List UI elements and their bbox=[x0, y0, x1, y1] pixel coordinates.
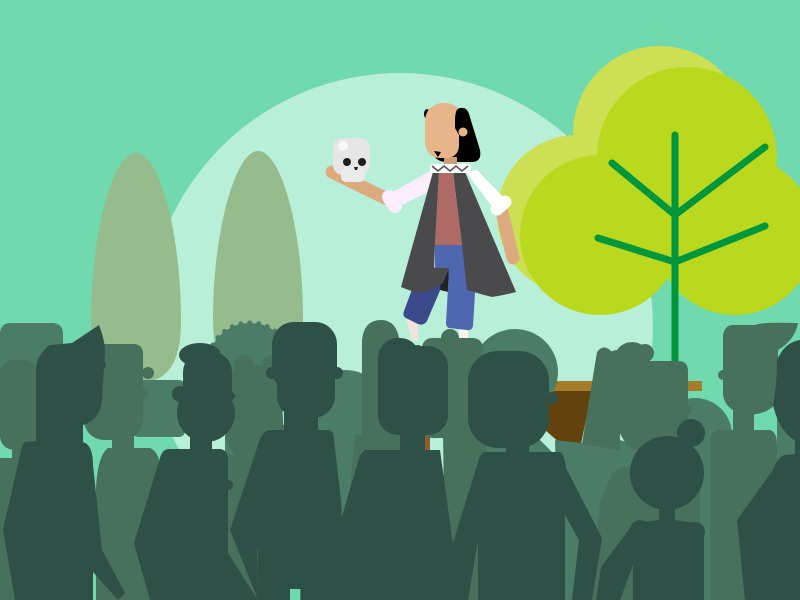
crowd person behind bun figure bbox=[84, 344, 160, 600]
goatee bbox=[434, 151, 441, 157]
tree foliage light bbox=[497, 46, 747, 295]
ear bbox=[458, 128, 468, 136]
hair bbox=[424, 108, 480, 162]
front figure with pointed hair bbox=[3, 325, 125, 600]
front figure with hair bun bbox=[596, 419, 705, 600]
large pale circle bbox=[147, 73, 653, 579]
shirt bbox=[435, 173, 462, 245]
actor bbox=[332, 103, 516, 340]
tree foliage main bbox=[520, 67, 800, 315]
front leg bbox=[435, 245, 475, 330]
skull bbox=[333, 138, 370, 182]
stage bbox=[275, 381, 702, 451]
crowd person right of stage bbox=[582, 342, 700, 600]
tree bbox=[497, 46, 800, 365]
crowd person centre-left bbox=[225, 355, 285, 600]
cape bbox=[401, 172, 516, 297]
front figure with curly bun bbox=[134, 343, 258, 600]
neck bbox=[444, 157, 457, 165]
feet bbox=[406, 320, 468, 340]
crowd person far right bbox=[710, 323, 798, 600]
crowd person centre bbox=[422, 329, 491, 600]
poplar trees bbox=[91, 151, 303, 380]
tall crowd person bbox=[340, 320, 440, 600]
front figure far right bbox=[737, 340, 800, 600]
back crowd bbox=[0, 323, 800, 600]
crowd person far left bbox=[0, 360, 38, 600]
collar bbox=[430, 164, 471, 173]
back leg bbox=[403, 267, 450, 325]
front crowd bbox=[3, 322, 800, 600]
right sleeve bbox=[466, 170, 508, 213]
front figure with tall hair bbox=[338, 338, 453, 600]
right arm bbox=[502, 212, 513, 258]
tree trunk and branches bbox=[598, 135, 765, 365]
front figure with flat cap bbox=[230, 322, 345, 600]
middle crowd bbox=[0, 320, 798, 600]
head bbox=[425, 103, 459, 158]
left sleeve bbox=[387, 170, 432, 208]
front figure with round head bbox=[445, 351, 602, 600]
leg shadow bbox=[440, 270, 449, 292]
left arm holding skull bbox=[332, 172, 385, 198]
